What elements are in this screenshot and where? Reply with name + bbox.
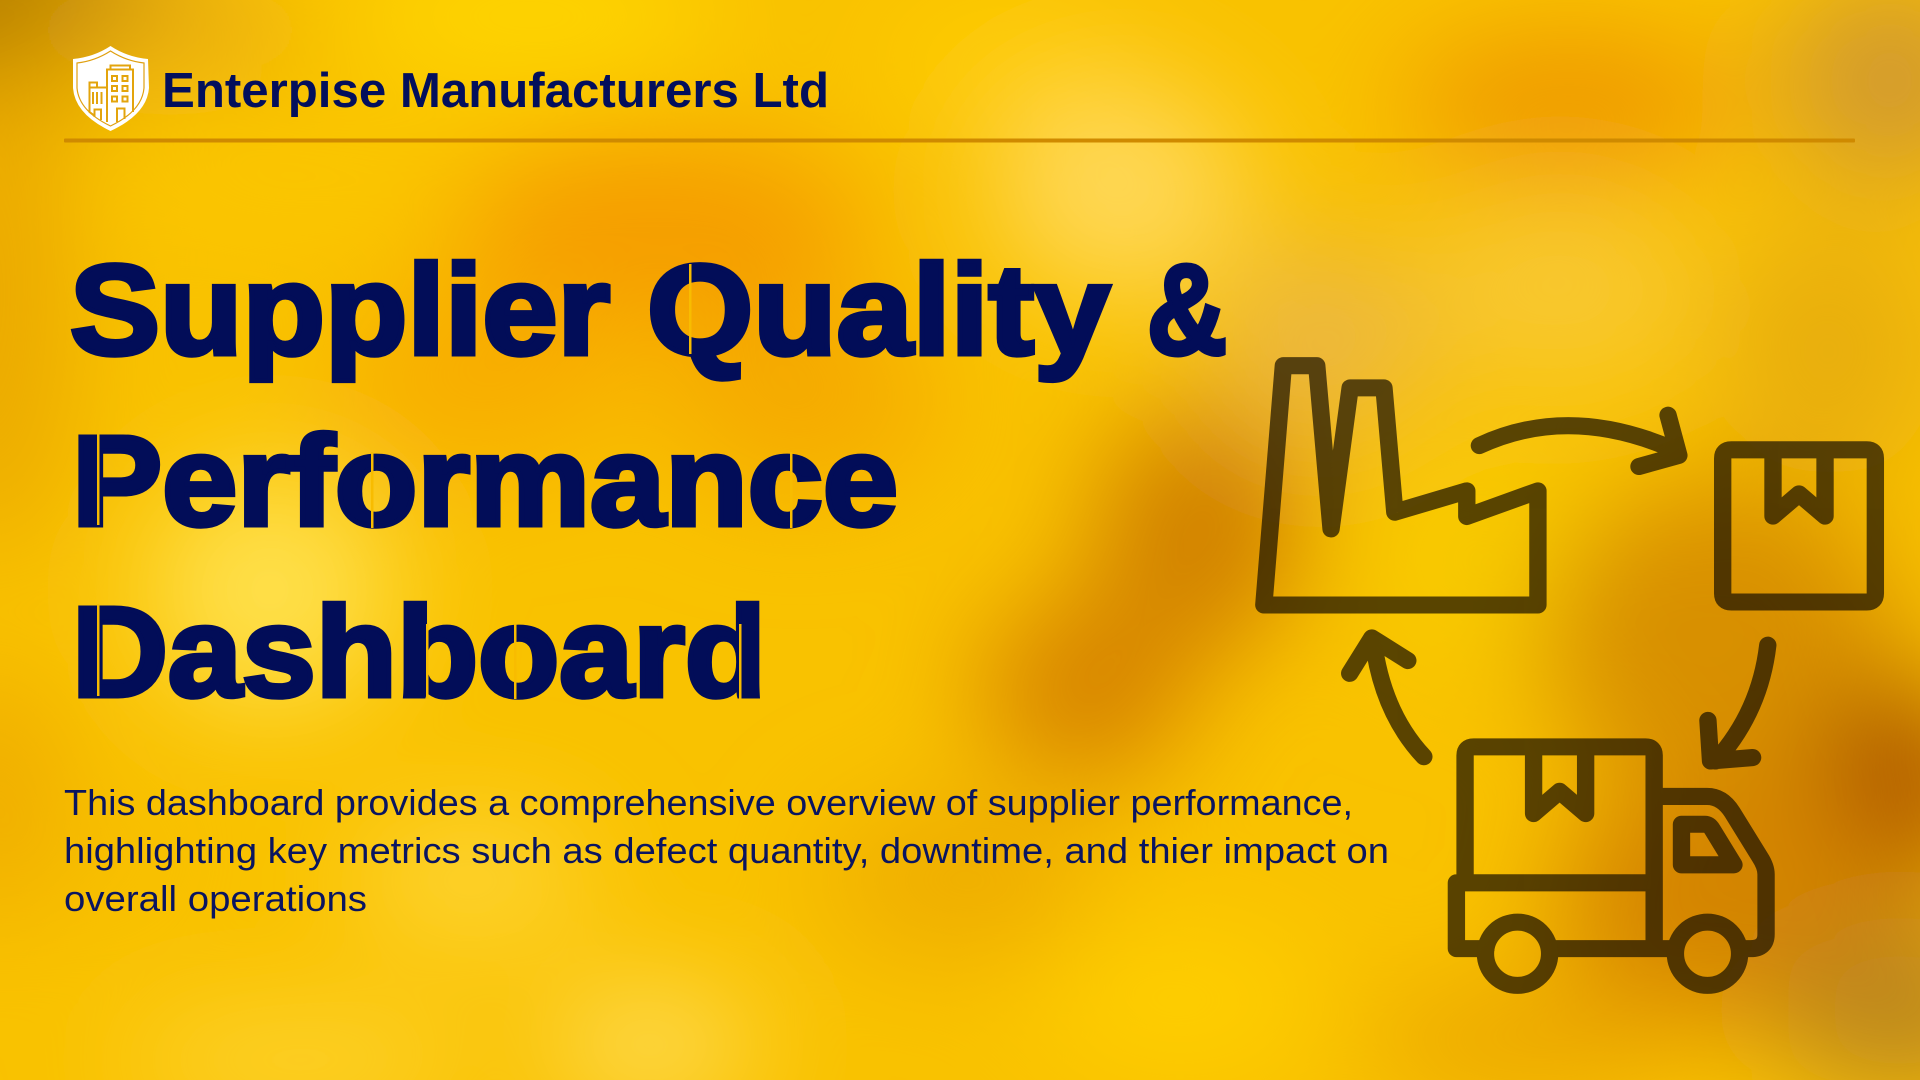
icon: delivery truck — [1456, 747, 1766, 949]
title — [70, 239, 1227, 724]
arrow: truck to factory — [1350, 638, 1424, 757]
title: Performance — [72, 410, 898, 553]
title: Supplier — [70, 239, 610, 382]
description paragraph: overall operations — [64, 878, 367, 919]
title: Quality — [647, 239, 1110, 382]
company name: Enterpise Manufacturers Ltd — [162, 64, 829, 118]
logo: shield with buildings — [73, 46, 149, 131]
description paragraph — [64, 782, 1389, 919]
icon: factory — [1264, 366, 1538, 605]
description paragraph: highlighting key metrics such as defect quantity, downtime, and thier impact on — [64, 830, 1389, 871]
header rule — [64, 138, 1855, 142]
arrow: box to truck — [1708, 645, 1768, 761]
description paragraph: This dashboard provides a comprehensive overview of supplier performance, — [64, 782, 1353, 823]
icon: supply chain cycle — [1264, 366, 1875, 985]
title: & — [1147, 239, 1227, 382]
icon: package box — [1723, 450, 1875, 602]
arrow: factory to box — [1479, 415, 1679, 467]
title: Dashboard — [72, 581, 766, 724]
